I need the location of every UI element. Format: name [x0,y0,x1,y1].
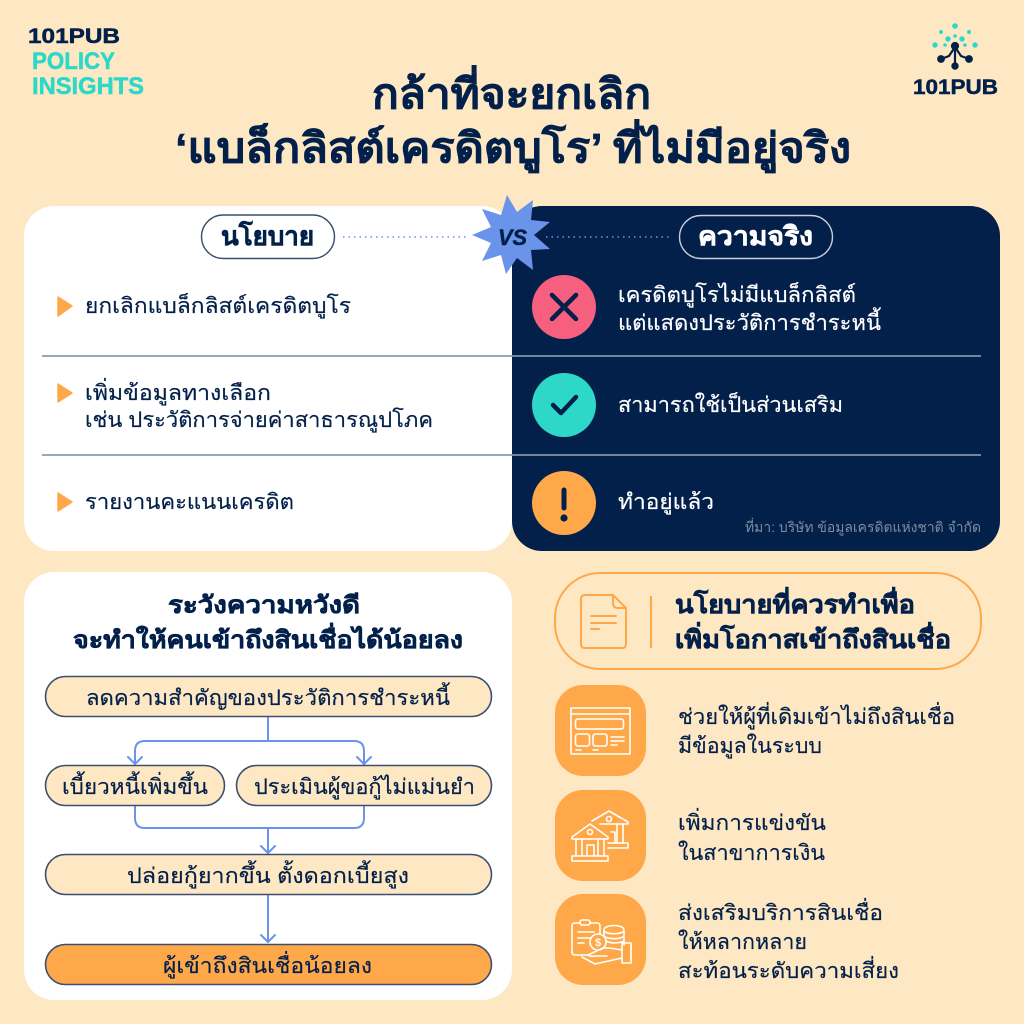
vs badge: VS [498,225,527,250]
logo: 101PUB network mark [913,23,998,99]
reality item 3 [532,471,714,535]
panel: reality [512,206,1000,551]
brand label: 101PUB Policy Insights [28,25,144,100]
icon: check [532,373,596,437]
flow step 1 [46,676,492,716]
icon: web page [555,685,646,776]
flow step 4: result: ผู้เข้าถึงสินเชื่อน้อยลง [163,951,372,979]
reality item 3: ทำอยู่แล้ว [618,490,714,515]
flow arrows [128,717,371,942]
recommendation 1: มีข้อมูลในระบบ [678,733,822,759]
heading pill: recommended policies [555,573,981,669]
reality item 2 [532,373,843,437]
recommendation 2: เพิ่มการแข่งขัน [678,808,826,835]
logo: 101PUB network mark: 101PUB [913,76,998,99]
heading: ระวังความหวังดี [168,592,360,619]
title: กล้าที่จะยกเลิก [372,65,651,117]
recommendation 1 [555,685,955,776]
source note: ที่มา: บริษัท ข้อมูลเครดิตแห่งชาติ จำกัด [745,518,981,536]
reality item 1: เครดิตบูโรไม่มีแบล็กลิสต์ [618,280,856,308]
heading [73,592,463,654]
vs badge [472,195,550,274]
title [175,65,851,174]
policy item 2: เพิ่มข้อมูลทางเลือก [85,378,271,406]
policy item 3: รายงานคะแนนเครดิต [85,490,294,514]
flow step 2a [46,766,224,806]
icon: exclamation [532,471,596,535]
heading pill: policy [202,215,334,258]
flow step 1: ลดความสำคัญของประวัติการชำระหนี้ [86,682,450,710]
brand label: 101PUB Policy Insights: 101PUB [28,25,120,48]
reality item 2: สามารถใช้เป็นส่วนเสริม [618,390,843,417]
icon: banks [555,790,646,881]
heading pill: reality [680,216,832,258]
panel: good intentions warning [24,572,512,1000]
recommendation 3 [555,894,899,985]
flow step 2a: เบี้ยวหนี้เพิ่มขึ้น [62,771,208,799]
brand label: 101PUB Policy Insights: POLICY [32,48,115,75]
recommendation 2 [555,790,826,881]
recommendation 3: ให้หลากหลาย [678,929,807,954]
flow step 3: ปล่อยกู้ยากขึ้น ตั้งดอกเบี้ยสูง [127,860,409,889]
recommendation 3: ส่งเสริมบริการสินเชื่อ [678,898,883,925]
recommendation 1: ช่วยให้ผู้ที่เดิมเข้าไม่ถึงสินเชื่อ [678,702,955,730]
heading pill: policy: นโยบาย [221,220,314,251]
heading: จะทำให้คนเข้าถึงสินเชื่อได้น้อยลง [73,622,463,654]
icon: hand, coins and clipboard: $ [595,937,601,949]
reality item 1: แต่แสดงประวัติการชำระหนี้ [618,307,881,335]
flow step 2b [236,766,492,806]
recommendation 2: ในสาขาการเงิน [678,840,825,865]
heading pill: recommended policies: เพิ่มโอกาสเข้าถึงสินเชื่อ [675,622,951,654]
flow step 3 [46,854,492,894]
reality item 1 [532,275,881,339]
title: ‘แบล็กลิสต์เครดิตบูโร’ ที่ไม่มีอยู่จริง [175,119,851,174]
policy item 1: ยกเลิกแบล็กลิสต์เครดิตบูโร [85,291,351,319]
policy item 2: เช่น ประวัติการจ่ายค่าสาธารณูปโภค [85,407,433,433]
icon: document [581,595,626,648]
brand label: 101PUB Policy Insights: INSIGHTS [32,73,144,100]
panel: policy [24,206,512,551]
icon: hand, coins and clipboard [555,894,646,985]
flow step 4: result [46,944,492,984]
flow step 2b: ประเมินผู้ขอกู้ไม่แม่นยำ [254,774,475,800]
heading pill: recommended policies: นโยบายที่ควรทำเพื่อ [675,587,915,619]
heading pill: reality: ความจริง [698,221,813,251]
policy item 2 [58,378,433,433]
recommendation 3: สะท้อนระดับความเสี่ยง [678,956,899,983]
icon: cross [532,275,596,339]
